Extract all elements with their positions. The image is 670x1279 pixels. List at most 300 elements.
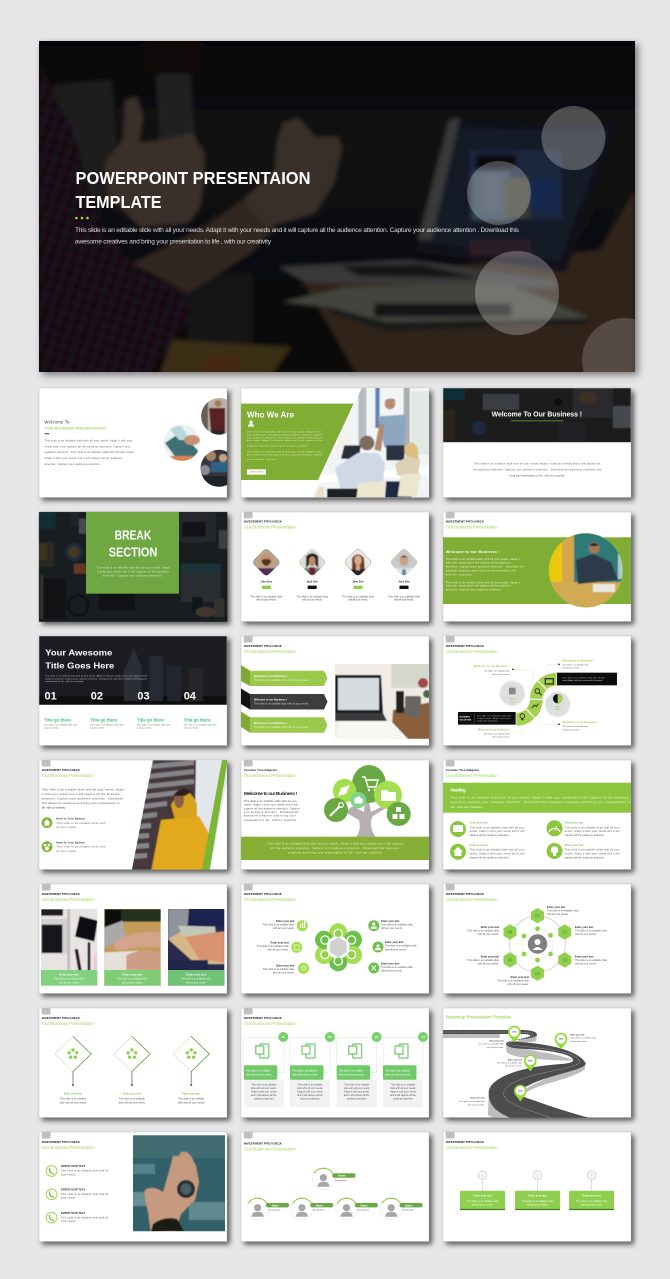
map pin 2 [555, 1033, 567, 1049]
header: Our Business Presentation [244, 649, 296, 655]
header [446, 636, 498, 655]
black box lower left: needs and it will capture [477, 720, 498, 723]
tree leaf: cubes [387, 802, 411, 826]
column 3: Adapt it with your needs [344, 1090, 370, 1093]
slide 17: four phone columns [241, 1008, 429, 1118]
option: display: capture all the audience attention. [470, 834, 510, 837]
slide 9: s-curve process diagram [443, 636, 631, 746]
band paragraph: This slide is an editable slide with all your needs. Adapt it [446, 581, 520, 584]
paragraph: attention. Capture your audience attention . Download [42, 796, 123, 800]
names and captions: Josh Doe [398, 579, 410, 583]
option: home [450, 843, 525, 860]
black box top right: This slide is an editable slide with all your [562, 676, 605, 679]
band paragraph [267, 842, 404, 854]
right labels: Enter your text [575, 954, 593, 958]
black box top right: needs. Adapt it with your needs and it will capture [562, 679, 602, 682]
left labels: Enter your text [481, 954, 499, 958]
center person icon [528, 934, 547, 954]
outer rings [510, 916, 566, 972]
numbers [44, 690, 197, 702]
contact row 1: This slide is an editable slide with all [61, 1170, 108, 1173]
road labels: Enter your text [570, 1033, 585, 1036]
right text blocks: with all your needs. [381, 970, 403, 973]
centered paragraph: This slide is an editable slide with all your needs. Adapt it with your needs and it will capture all [474, 463, 600, 466]
column 3: This slide is an editable [339, 1070, 364, 1072]
card 1 [460, 1170, 505, 1210]
column 2 [290, 1032, 335, 1107]
diamond 2: slide with all your needs. [118, 1101, 146, 1104]
names and captions: This slide is an editable slide [296, 595, 329, 598]
centered paragraph: bring your presentation to life , with our creativity [510, 474, 565, 477]
column 2: 02 [328, 1035, 332, 1039]
left labels: with all your needs. [507, 983, 529, 986]
portrait 3 [344, 549, 372, 576]
option: idea: Enter your text [565, 843, 583, 847]
band paragraph [450, 795, 631, 809]
names and captions: with all your needs. [348, 599, 368, 602]
column 1: This slide is an editable [251, 1083, 277, 1086]
header: Our Business Presentation [446, 773, 498, 779]
numbers: 03 [137, 690, 150, 702]
header [446, 884, 498, 903]
header [244, 512, 296, 530]
option: home: capture all the audience attention. [470, 856, 510, 859]
right labels: with all your needs. [575, 963, 597, 966]
diagonal green stripe [202, 760, 227, 870]
column 3: 03 [375, 1035, 379, 1039]
right text blocks: with all your needs. [385, 948, 407, 951]
names and captions: with all your needs. [256, 599, 277, 602]
left labels: Enter your text [510, 975, 529, 979]
right circle: Idea [556, 709, 559, 711]
paragraph [44, 440, 135, 466]
green band [443, 537, 631, 604]
arrow 1: This slide is an editable slide with all your needs. [254, 679, 309, 682]
paragraph: awesome creatives and bring your [244, 814, 296, 818]
option: idea: This slide is an editable slide with all your [565, 849, 620, 852]
green subheading: OUR BUSINESS PRESENTATION [44, 426, 106, 430]
map pin 2: 2020 [559, 1039, 563, 1041]
column 3: slide with all your needs. [339, 1074, 365, 1076]
hero translucent circles [467, 106, 635, 372]
heading: Welcome to our Business ! [244, 791, 298, 797]
header: INVESTMENT PITCH DECK [42, 768, 81, 772]
left text blocks: with all your needs. [273, 927, 295, 930]
road labels: Enter your text [490, 1039, 504, 1042]
arrow 3 [241, 712, 328, 733]
option: home: This slide is an editable slide with all your [470, 849, 525, 852]
names and captions: This slide is an editable slide [388, 595, 421, 598]
header: Our Business Presentation [244, 1021, 296, 1027]
slide 4: break section [39, 512, 229, 623]
caption bar 1 [41, 970, 97, 986]
portrait 4 [390, 549, 418, 576]
person 2: Name [316, 1203, 324, 1207]
header: Our Business Presentation [42, 897, 94, 903]
diamond 1: This slide is an editable [60, 1097, 87, 1100]
band paragraph: attention. Capture your audience attention. [446, 589, 502, 592]
header: Our Business Presentation [446, 1145, 498, 1151]
option: idea [546, 843, 620, 859]
band paragraph [446, 558, 524, 592]
road labels: This slide is an editable slide [459, 1100, 486, 1103]
person 1 [247, 1198, 289, 1220]
option: display [450, 821, 525, 837]
right circle [544, 691, 571, 718]
option: gauge: This slide is an editable slide with all your [565, 826, 620, 829]
road surface [443, 1030, 593, 1120]
road labels [459, 1033, 596, 1106]
black box top right [557, 673, 617, 685]
caption bar 1: with all your needs. [59, 981, 79, 984]
card 3 [569, 1170, 614, 1210]
column 1: Adapt it with your needs [251, 1090, 277, 1093]
column 4: audience attention [393, 1097, 413, 1100]
right text blocks: This slide is an editable slide [381, 924, 413, 927]
slide 3: welcome to our business [443, 388, 631, 498]
road labels: This slide is an editable slide [478, 1043, 505, 1046]
person 4: Name [405, 1203, 413, 1207]
option: home: needs. Adapt it with your needs and it will [470, 852, 525, 855]
person 2 [291, 1198, 333, 1220]
photo circle: man at wall [201, 398, 228, 435]
panel: hero title slide [39, 41, 635, 372]
four columns: all your needs. [184, 727, 199, 730]
column 3 [337, 1032, 382, 1107]
label lower right: Welcome to our Business ! [562, 721, 598, 724]
slide 5: team of four [241, 512, 429, 622]
column 4: This slide is an editable [385, 1070, 411, 1072]
right labels: This slide is an editable slide [547, 910, 579, 913]
numbers: 02 [91, 690, 103, 702]
header: Our Business Presentation [42, 773, 94, 779]
laptop photo [333, 662, 431, 742]
paragraph: life , with our creativity. [42, 805, 66, 809]
left text blocks: with all your needs. [273, 971, 295, 974]
contact row 3: your needs. [61, 1220, 76, 1223]
column 1: slide with all your needs. [251, 1087, 277, 1090]
header: Our Business Presentation [446, 897, 498, 903]
label top right [558, 660, 594, 670]
column 1: 01 [282, 1035, 285, 1039]
header: INVESTMENT PITCH DECK [446, 520, 485, 524]
slide title: Your Awesome [45, 647, 113, 657]
column 2: This slide is an editable [292, 1070, 318, 1072]
left labels: with all your needs. [478, 933, 499, 936]
label bottom left [478, 729, 511, 738]
contact row 1 [46, 1164, 108, 1176]
header [446, 1132, 498, 1151]
hero description: awesome creatives and bring your presentation to life , with our creativity [75, 238, 272, 246]
contact row 1: ENTER YOUR TEXT [61, 1164, 85, 1168]
contact row 3: ENTER YOUR TEXT [61, 1211, 85, 1215]
slide 18: roadmap [443, 1008, 631, 1120]
paragraph [42, 788, 124, 809]
header: INVESTMENT PITCH DECK [244, 892, 283, 896]
panel paragraph: your needs and it will capture all the audience attention. Capture [247, 454, 323, 457]
label top right: with all your needs. [562, 667, 580, 670]
header: Our Business Presentation [446, 649, 498, 655]
left text blocks: This slide is an editable slide [257, 945, 289, 948]
header: INVESTMENT PITCH DECK [42, 892, 81, 896]
arrow 2: This slide is an editable slide with all your needs. [254, 702, 309, 706]
caption bar 3: Enter your text [186, 972, 206, 976]
flower lobes [315, 923, 362, 971]
road labels: This slide is an editable slide [570, 1037, 596, 1040]
band paragraph: This slide is an editable slide with all your needs. Adapt it with your needs and it will capture all the audience [450, 795, 629, 799]
tree leaf: rocket [333, 779, 356, 802]
contact row 2 [46, 1187, 108, 1200]
intro paragraph [45, 675, 148, 683]
header: INVESTMENT PITCH DECK [244, 520, 283, 524]
arrow 2 [241, 688, 328, 710]
slide 16: three diamonds [39, 1008, 227, 1118]
label top left: with all your needs. [492, 673, 510, 676]
paragraph: presentation to life , with our creativity. [244, 818, 297, 822]
road labels: with all your needs. [505, 1065, 522, 1068]
card 2 [515, 1170, 560, 1210]
panel paragraph: your audience attention. [247, 458, 277, 461]
header: INVESTMENT PITCH DECK [42, 1140, 81, 1144]
office photo [312, 388, 429, 498]
band heading: Heading [450, 788, 466, 793]
band paragraph: with your needs and it will capture all the audience [446, 585, 511, 588]
column 3: and it will capture all the [344, 1094, 370, 1097]
card 1: This slide is an editable slide [467, 1200, 499, 1203]
contact row 2: ENTER YOUR TEXT [61, 1187, 85, 1191]
names and captions: with all your needs. [302, 599, 322, 602]
panel paragraph: your needs and it will capture all the audience attention. Capture [247, 434, 323, 437]
option 2: Here Is Your Option: [56, 840, 86, 844]
card 2: Enter your text [528, 1194, 547, 1198]
slide 14: flower diagram [241, 884, 429, 994]
black box lower left: SOLUTIONS [460, 720, 472, 722]
arrow 3: This slide is an editable slide with all your needs. [254, 726, 309, 729]
left circle [499, 680, 526, 707]
column 4: and it will capture all the [390, 1094, 416, 1097]
slide 11: creative tree diagram [241, 760, 429, 870]
person 3: Designation [358, 1209, 370, 1212]
band paragraph: with our creativity [446, 573, 473, 576]
hexagon numbers: 03 [562, 958, 568, 962]
card 3: 3 [591, 1173, 593, 1177]
card 1: with all your needs. [472, 1204, 494, 1207]
dark desk photo [443, 388, 631, 443]
right icons [368, 920, 384, 974]
intro paragraph: audience attention. Capture your audience attention . Download the awesome creatives and bring your [45, 677, 148, 680]
right labels: This slide is an editable slide [575, 929, 607, 932]
road wall [443, 1034, 586, 1120]
right text blocks: This slide is an editable slide [381, 966, 413, 969]
panel paragraph: your audience attention . This slide is an editable slide with all [247, 436, 323, 439]
names and captions [250, 579, 421, 602]
contact row 3 [46, 1211, 108, 1223]
center hexagon [330, 937, 347, 957]
icon: person [248, 421, 254, 427]
arrow 3: Welcome to our Business ! [254, 722, 287, 725]
slide 6: welcome band with circle photo [443, 512, 631, 622]
photo: building and man in hoodie [129, 758, 229, 872]
option: gauge: Enter your text [565, 821, 583, 825]
paragraph: attention. Capture your audience attention . [44, 463, 102, 466]
compass photo [129, 1132, 229, 1234]
names and captions: with all your needs. [394, 599, 414, 602]
header [42, 760, 94, 779]
slide title second line: Title Goes Here [45, 660, 115, 670]
label top left: Welcome to our Business ! [474, 665, 510, 668]
left labels: Enter your text [481, 925, 499, 929]
paragraph: your audience attention . Download the [244, 810, 299, 814]
left labels: This slide is an editable slide [497, 980, 529, 983]
tree trunk [345, 802, 389, 840]
tree leaf: wrench [324, 798, 348, 822]
header: Creative Tree Diagram [446, 768, 479, 772]
header: Our Business Presentation [244, 897, 296, 903]
centered paragraph [473, 463, 602, 477]
paragraph: needs and it will capture all the audience attention. Capture your [44, 445, 131, 448]
right labels: with all your needs. [547, 913, 569, 916]
right labels: Enter your text [547, 905, 565, 909]
black box lower left: BUSINESS [460, 716, 470, 718]
header [244, 1132, 296, 1152]
road labels: This slide is an editable slide [497, 1061, 523, 1064]
option: idea: capture all the audience attention. [565, 856, 605, 859]
green panel [86, 512, 179, 594]
left icons [291, 920, 309, 974]
person 3: Name [360, 1203, 368, 1207]
intro paragraph: presentation to life , with our creativity [45, 680, 83, 683]
caption bar 2: Enter your text [123, 972, 142, 976]
panel paragraph: This slide is an editable slide with all your needs. Adapt it with [247, 431, 322, 434]
hero description: This slide is an editable slide with all your needs. Adapt it with your needs and it will capture all the audience attention. Capture your audience attention . Download this [75, 227, 520, 234]
column 1: audience attention [254, 1097, 274, 1100]
paragraph: capture all the audience attention. Capture [244, 806, 300, 810]
four columns: This slide is an editable slide with [44, 724, 78, 727]
label bottom left: with all your needs. [492, 735, 510, 738]
label lower right: This slide is an editable slide [562, 725, 589, 728]
panel paragraph [97, 567, 170, 577]
photo: keyboard and phone [39, 907, 99, 987]
map pin 4 [514, 1085, 527, 1101]
slide 2: who we are [241, 385, 434, 501]
column 2: slide with all your needs. [292, 1074, 318, 1076]
map pin 1 [508, 1026, 521, 1042]
black box lower left: all your needs. Adapt it with your [477, 717, 511, 720]
header: Our Business Presentation [42, 1145, 94, 1151]
top person [312, 1168, 355, 1190]
caption bar 1: This slide is an editable slide [54, 977, 85, 980]
slide 7: your awesome title [39, 636, 227, 746]
header [446, 512, 498, 530]
panel paragraph: it with your needs and it will capture all the audience [97, 571, 170, 574]
header: INVESTMENT PITCH DECK [244, 644, 283, 648]
contact row 3: This slide is an editable slide with all [61, 1216, 108, 1219]
road labels: Enter your text [508, 1058, 522, 1061]
person 1: Name [272, 1203, 279, 1207]
four columns [44, 717, 217, 730]
four columns: Title go there [137, 717, 165, 722]
column 2: audience attention [300, 1097, 320, 1100]
four columns: all your needs. [90, 727, 106, 730]
header [446, 760, 498, 779]
four columns: This slide is an editable slide with [137, 724, 171, 727]
panel heading: Who We Are [247, 411, 295, 420]
right text blocks: Enter your text [385, 940, 403, 944]
green band [443, 783, 631, 813]
green band [241, 837, 429, 860]
paragraph: This slide is an editable slide with all your needs. Adapt it with your [44, 440, 133, 443]
left text blocks: Enter your text [276, 963, 295, 967]
connector lines [513, 664, 559, 733]
arrow 2: Welcome to our Business ! [254, 698, 287, 702]
band heading: Welcome to our Business ! [446, 550, 500, 554]
diamond 1: slide with all your needs. [59, 1101, 87, 1104]
right text blocks [381, 919, 417, 973]
column 2: slide with all your needs. [297, 1087, 323, 1090]
band paragraph: attention. Capture your audience attention . Download this awesome creatives and bring your presentation to [450, 800, 631, 804]
four columns: all your needs. [44, 727, 59, 730]
slide 19: compass photo [39, 1132, 229, 1242]
header: Creative Tree Diagram [244, 768, 277, 772]
option 2 [42, 840, 106, 853]
panel paragraph: audience attention. Capture your audience attention. [247, 444, 309, 447]
caption bar 2 [104, 970, 161, 986]
four columns: This slide is an editable slide with [90, 724, 124, 727]
black box lower left: This slide is an editable slide with [477, 714, 510, 717]
heading underline [511, 420, 564, 422]
road center line [443, 1032, 580, 1120]
left text blocks [257, 919, 295, 974]
person 1: Designation [269, 1209, 281, 1212]
label bottom left: Welcome to our Business ! [478, 729, 510, 732]
option: idea: needs. Adapt it with your needs and it will [565, 852, 620, 855]
button [247, 469, 266, 475]
card 3: with all your needs. [581, 1204, 603, 1207]
paragraph: it with your needs and it will capture all the audience [42, 792, 120, 796]
slide 10: yellow hoodie [39, 758, 229, 872]
dots [44, 433, 49, 434]
band paragraph: creatives and bring your presentation to life , with our creativity [288, 850, 383, 854]
band paragraph: This slide is an editable slide with all your needs. Adapt it [446, 558, 520, 561]
card 3: This slide is an editable slide [576, 1200, 608, 1203]
person 3 [336, 1198, 378, 1220]
header: Our Business Presentation [244, 524, 296, 530]
button: LEARN MORE [250, 471, 264, 474]
header: INVESTMENT PITCH DECK [244, 1142, 283, 1146]
circular photo [548, 533, 623, 608]
hero title second line: TEMPLATE [76, 192, 162, 212]
paragraph: This slide is an editable slide with all your [244, 799, 297, 803]
right labels [547, 905, 607, 966]
column 3: audience attention [347, 1097, 367, 1100]
break heading: BREAK [115, 528, 152, 543]
paragraph: This slide is an editable slide with all your needs. Adapt [42, 788, 124, 792]
label lower right: with all your needs. [562, 728, 580, 731]
centered paragraph: the audience attention. Capture your audience attention . Download the awesome creatives and [473, 468, 602, 471]
band paragraph: awesome creatives and bring your presentation to life , [446, 569, 518, 572]
tree leaf: cart [352, 765, 386, 803]
label top left: This slide is an editable slide [484, 670, 511, 673]
left text blocks: with all your needs. [267, 949, 289, 952]
diamond 3: This slide is an editable [178, 1097, 205, 1100]
right labels: Enter your text [575, 925, 593, 929]
slide 8: arrows with laptop photo [241, 636, 431, 746]
paragraph: Adapt it with your needs and it will capture all the audience [44, 457, 123, 460]
portrait 1 [253, 549, 280, 576]
roadmap title: Roadmap Presentation Template [446, 1014, 512, 1019]
right labels: with all your needs. [575, 933, 597, 936]
diamond 3: Enter your text [182, 1092, 200, 1096]
